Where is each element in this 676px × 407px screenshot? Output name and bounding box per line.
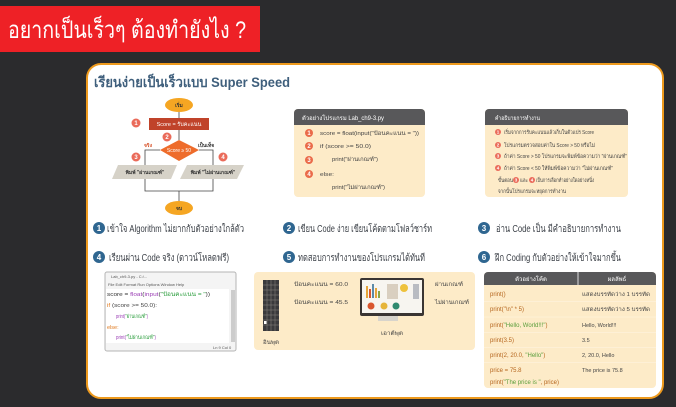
title banner: อยากเป็นเร็วๆ ต้องทำยังไง ?: [8, 15, 246, 44]
code editor window: Lab_ch9-3.py - C:/...: [111, 274, 147, 279]
step 1 heading: 1: [97, 224, 102, 233]
step 1 heading: [93, 222, 244, 235]
code sample panel: 1: [307, 131, 311, 137]
code editor window: [105, 272, 236, 351]
example table: Hello, World!!!: [582, 323, 617, 329]
step 4 heading: [93, 251, 229, 264]
explanation panel: เป็นการเลือกทำอย่างใดอย่างหนึ่ง: [536, 176, 594, 184]
panel heading: เรียนง่ายเป็นเร็วแบบ Super Speed: [94, 73, 290, 90]
code editor window: File Edit Format Run Options Window Help: [108, 282, 185, 287]
step 3 heading: 3: [482, 224, 487, 233]
example table: 3.5: [582, 338, 590, 344]
example table: print(): [490, 292, 506, 298]
flowchart: พิมพ์ "ผ่านเกณฑ์": [126, 169, 165, 176]
flowchart: 3: [134, 155, 138, 161]
step 6 heading: ฝึก Coding กับตัวอย่างให้เข้าใจมากขึ้น: [494, 250, 621, 264]
explanation panel: คำอธิบายการทำงาน: [495, 115, 540, 122]
explanation panel: ถ้าค่า Score < 50 ให้พิมพ์ข้อความว่า "ไม่ผ่านเกณฑ์": [504, 165, 613, 172]
flowchart: เป็นเท็จ: [198, 141, 214, 149]
step 5 heading: 5: [287, 253, 292, 262]
example table: 2, 20.0, Hello: [582, 353, 614, 359]
flowchart: 1: [134, 121, 138, 127]
step 1 heading: เข้าใจ Algorithm ไม่ยากกับตัวอย่างใกล้ตัว: [107, 223, 244, 235]
step 5 heading: ทดสอบการทำงานของโปรแกรมได้ทันที: [298, 251, 425, 264]
input output panel: [254, 272, 475, 350]
flowchart: พิมพ์ "ไม่ผ่านเกณฑ์": [191, 169, 236, 176]
explanation panel: 4: [497, 166, 500, 171]
code sample panel: 4: [307, 172, 311, 178]
code sample panel: if (score >= 50.0): [320, 144, 371, 150]
example table: [484, 272, 656, 388]
icon: keyboard: [263, 280, 279, 331]
step 6 heading: 6: [482, 253, 487, 262]
explanation panel: โปรแกรมตรวจสอบค่าใน Score > 50 หรือไม่: [504, 141, 595, 149]
step 6 heading: [478, 250, 621, 264]
step 3 heading: [478, 221, 621, 235]
code sample panel: else:: [320, 172, 335, 178]
code sample panel: 3: [307, 158, 311, 164]
step 4 heading: เรียนผ่าน Code จริง (ดาวน์โหลดฟรี): [109, 251, 229, 264]
flowchart: จบ: [176, 206, 182, 212]
code editor window: print("ไม่ผ่านเกณฑ์"): [116, 334, 156, 341]
flowchart: เริ่ม: [175, 101, 183, 109]
code editor window: print("ผ่านเกณฑ์"): [116, 313, 148, 320]
explanation panel: 3: [515, 178, 518, 183]
example table: print(3.5): [490, 338, 514, 344]
title banner: [0, 6, 260, 52]
code editor window: Ln 9 Col 0: [213, 345, 232, 350]
explanation panel: จากนั้นโปรแกรมจะหยุดการทำงาน: [498, 187, 566, 195]
example table: print("\n" * 5): [490, 307, 524, 313]
flowchart: 4: [221, 155, 225, 161]
example table: print("Hello, World!!!"): [490, 323, 548, 329]
example table: The price is 75.8: [582, 368, 623, 374]
flowchart: จริง: [144, 142, 153, 149]
input output panel: เอาต์พุต: [381, 330, 403, 337]
flowchart: 2: [165, 135, 169, 141]
explanation panel: 3: [497, 154, 500, 159]
example table: print("The price is ", price): [490, 380, 559, 386]
explanation panel: 2: [497, 143, 500, 148]
code editor window: score = float (input ("ป้อนคะแนน = " )): [107, 291, 210, 298]
input output panel: อินพุต: [262, 339, 279, 346]
step 4 heading: 4: [97, 253, 102, 262]
code sample panel: print("ผ่านเกณฑ์"): [332, 156, 378, 163]
flowchart: Score ≥ 50: [167, 148, 191, 154]
example table: ตัวอย่างโค้ด: [515, 275, 547, 283]
step 2 heading: [283, 222, 432, 235]
code sample panel: ตัวอย่างโปรแกรม Lab_ch9-3.py: [302, 114, 384, 122]
explanation panel: 1: [497, 130, 500, 135]
explanation panel: ถ้าค่า Score > 50 โปรแกรมจะพิมพ์ข้อความว่า "ผ่านเกณฑ์": [504, 152, 627, 160]
explanation panel: เริ่มจากการรับคะแนนแล้วเก็บในตัวแปร Score: [504, 128, 594, 136]
example table: print(2, 20.0, "Hello"): [490, 353, 545, 359]
step 5 heading: [283, 251, 425, 264]
example table: ผลลัพธ์: [608, 275, 627, 283]
flowchart: Score = รับคะแนน: [157, 121, 202, 128]
input output panel: ป้อนคะแนน = 45.5: [294, 299, 348, 306]
step 2 heading: เขียน Code ง่าย เขียนโค้ดตามโฟลว์ชาร์ท: [298, 222, 432, 235]
main panel: [87, 64, 663, 398]
example table: แสดงบรรทัดว่าง 1 บรรทัด: [582, 291, 650, 298]
input output panel: ผ่านเกณฑ์: [435, 281, 463, 288]
code sample panel: print("ไม่ผ่านเกณฑ์"): [332, 184, 385, 191]
code editor window: else:: [107, 325, 119, 331]
icon: monitor with charts: [360, 278, 424, 321]
input output panel: ไม่ผ่านเกณฑ์: [434, 299, 469, 306]
code sample panel: [294, 109, 425, 197]
example table: แสดงบรรทัดว่าง 5 บรรทัด: [582, 306, 650, 313]
step 3 heading: อ่าน Code เป็น มีคำอธิบายการทำงาน: [496, 221, 621, 235]
code sample panel: 2: [307, 144, 311, 150]
explanation panel: และ: [520, 178, 528, 184]
example table: price = 75.8: [490, 368, 522, 374]
code editor window: if (score >= 50.0):: [107, 303, 158, 309]
explanation panel: ขั้นตอน: [498, 176, 513, 184]
flowchart: [112, 98, 244, 215]
code sample panel: score = float(input("ป้อนคะแนน = ")): [320, 130, 419, 137]
step 2 heading: 2: [287, 224, 292, 233]
explanation panel: 4: [531, 178, 534, 183]
explanation panel: [485, 109, 628, 197]
input output panel: ป้อนคะแนน = 60.0: [294, 281, 348, 288]
